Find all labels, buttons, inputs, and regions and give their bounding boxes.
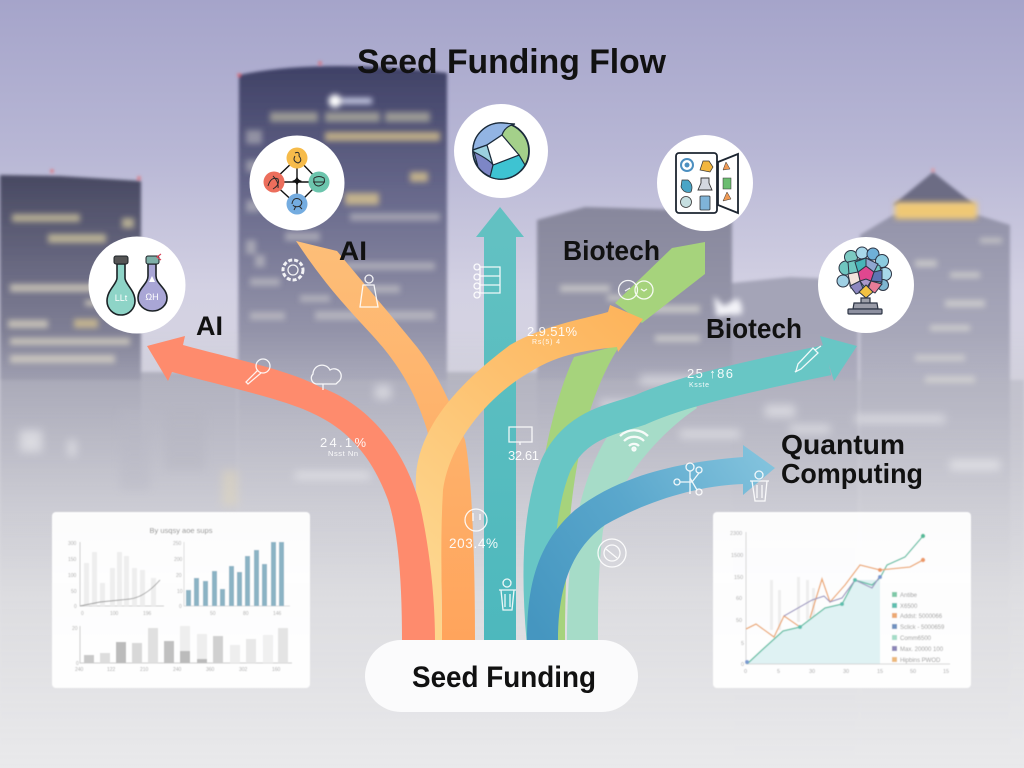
chart: grey bars: 240 bbox=[173, 667, 182, 673]
arrow: teal vertical bbox=[476, 207, 524, 640]
chart: blue bars: 80 bbox=[243, 611, 249, 617]
chart: grey bars: 302 bbox=[239, 667, 248, 673]
chart legend: Antibe bbox=[900, 593, 918, 599]
chart: grey bars: 240 bbox=[75, 667, 84, 673]
value: 2.9.51%: Rs(5) 4 bbox=[532, 339, 560, 346]
arrow: green to biotech bbox=[530, 242, 705, 640]
value: 24.1% bbox=[320, 435, 366, 458]
chart: faint line chart: 50 bbox=[71, 589, 77, 595]
chart axis labels: 5 bbox=[777, 669, 780, 675]
label: Quantum Computing: Quantum bbox=[781, 429, 905, 460]
chart: faint line chart: 100 bbox=[68, 573, 77, 579]
chart: grey bars bbox=[72, 626, 292, 673]
chart: faint line chart: 100 bbox=[110, 611, 119, 617]
chart: faint line chart: 0 bbox=[81, 611, 84, 617]
chart axis labels: 30 bbox=[809, 669, 815, 675]
title: Seed Funding Flow bbox=[357, 43, 667, 81]
icon: dropper bbox=[795, 346, 821, 372]
value: 25 186 bbox=[687, 366, 733, 389]
label: Biotech upper: Biotech bbox=[563, 235, 660, 266]
label: Quantum Computing: Computing bbox=[781, 458, 923, 489]
chart axis labels: 0 bbox=[744, 669, 747, 675]
chart legend: Comm6500 bbox=[900, 636, 932, 642]
icon: wifi bbox=[620, 430, 648, 450]
chart: blue bars: 20 bbox=[176, 573, 182, 579]
label: AI upper: AI bbox=[339, 236, 367, 266]
chart legend: Hipbins PWOD bbox=[900, 658, 941, 664]
chart: faint line chart: 150 bbox=[68, 557, 77, 563]
chart: blue bars bbox=[173, 541, 290, 617]
icon: list bbox=[474, 264, 500, 298]
chart: blue bars: 250 bbox=[173, 541, 182, 547]
arrow: mint branch bbox=[567, 395, 697, 640]
chart: grey bars: 360 bbox=[206, 667, 215, 673]
icon: magnifier bbox=[246, 359, 270, 384]
chart: faint line chart: 196 bbox=[143, 611, 152, 617]
value: 25 186: Ksste bbox=[689, 382, 709, 389]
value: 2.9.51% bbox=[527, 324, 577, 346]
chart axis labels: 1500 bbox=[731, 553, 743, 559]
icon: rose bbox=[598, 539, 626, 567]
icon: gear bbox=[283, 260, 303, 280]
value: 25 186: 25 ↑86 bbox=[687, 366, 733, 381]
icon circle: aperture bbox=[454, 104, 548, 198]
arrow: coral to AI bbox=[147, 336, 435, 640]
pill: Seed Funding bbox=[365, 640, 638, 712]
chart: blue bars: 50 bbox=[210, 611, 216, 617]
icon circle: quantum tree bbox=[818, 237, 914, 333]
icon circle: flasks bbox=[88, 236, 186, 334]
icon: weight bbox=[360, 275, 378, 307]
value: 2.9.51%: 2.9.51% bbox=[527, 324, 577, 339]
value: 32.61: 32.61 bbox=[508, 448, 539, 463]
chart axis labels bbox=[730, 531, 949, 675]
icon: double circles bbox=[618, 280, 653, 300]
chart: faint line chart: 0 bbox=[74, 604, 77, 610]
chart: grey bars: 160 bbox=[272, 667, 281, 673]
chart: blue bars: 200 bbox=[174, 557, 183, 563]
icon: nodes bbox=[674, 463, 702, 495]
icon circle: flasks: ΩH bbox=[145, 292, 159, 302]
value: 203.4%: 203.4% bbox=[449, 536, 498, 551]
arrow: teal to biotech bbox=[539, 336, 857, 640]
chart: blue bars: 10 bbox=[177, 589, 183, 595]
chart: blue bars: 146 bbox=[273, 611, 282, 617]
label: AI left: AI bbox=[196, 311, 223, 341]
chart: faint line chart: 300 bbox=[68, 541, 77, 547]
chart: grey bars: 0 bbox=[76, 661, 79, 667]
label: Biotech right: Biotech bbox=[706, 313, 802, 344]
white line icons on arrows bbox=[246, 260, 821, 610]
arrow: yellow to biotech bbox=[416, 305, 643, 640]
value: 24.1%: 24.1% bbox=[320, 435, 366, 450]
chart legend: Sclick - 5000659 bbox=[900, 625, 945, 631]
percentages on arrows bbox=[320, 324, 733, 551]
chart: grey bars: 122 bbox=[107, 667, 116, 673]
chart axis labels: 0 bbox=[741, 662, 744, 668]
chart: grey bars: 210 bbox=[140, 667, 149, 673]
chart: area and lines bbox=[745, 532, 950, 664]
chart axis labels: 50 bbox=[910, 669, 916, 675]
chart legend: Addst: 5000066 bbox=[900, 614, 943, 620]
chart title: By usqsy aoe sups bbox=[150, 526, 213, 535]
chart legend: X6500 bbox=[900, 604, 918, 610]
label: Quantum Computing bbox=[781, 429, 923, 489]
chart axis labels: 5 bbox=[741, 641, 744, 647]
chart axis labels: 30 bbox=[843, 669, 849, 675]
chart axis labels: 2300 bbox=[730, 531, 742, 537]
chart axis labels: 15 bbox=[943, 669, 949, 675]
arrow: blue to quantum computing bbox=[527, 445, 775, 640]
panel: left bar charts bbox=[52, 512, 310, 688]
icon: clock bbox=[465, 509, 487, 531]
icon: bin right bbox=[750, 471, 769, 501]
icon circle: flasks: LLt bbox=[115, 293, 128, 303]
pill: Seed Funding: Seed Funding bbox=[412, 661, 596, 694]
chart axis labels: 15 bbox=[877, 669, 883, 675]
icon: bin bbox=[499, 579, 516, 610]
value: 24.1%: Nsst Nn bbox=[328, 449, 358, 458]
chart axis labels: 60 bbox=[736, 596, 742, 602]
icon circle: connected network bbox=[250, 136, 344, 230]
chart: grey bars: 20 bbox=[72, 626, 78, 632]
chart: faint line chart bbox=[68, 541, 164, 617]
icon circle: lab cabinet bbox=[657, 135, 753, 231]
chart legend: Max. 20000 100 bbox=[900, 647, 944, 653]
icon: cloud bbox=[311, 365, 341, 390]
icon: monitor bbox=[509, 427, 532, 445]
arrow: orange to AI bbox=[296, 241, 475, 640]
chart legend bbox=[892, 592, 945, 664]
panel: right line chart bbox=[713, 512, 971, 688]
chart axis labels: 150 bbox=[734, 575, 743, 581]
chart: blue bars: 0 bbox=[179, 604, 182, 610]
chart axis labels: 50 bbox=[736, 618, 742, 624]
